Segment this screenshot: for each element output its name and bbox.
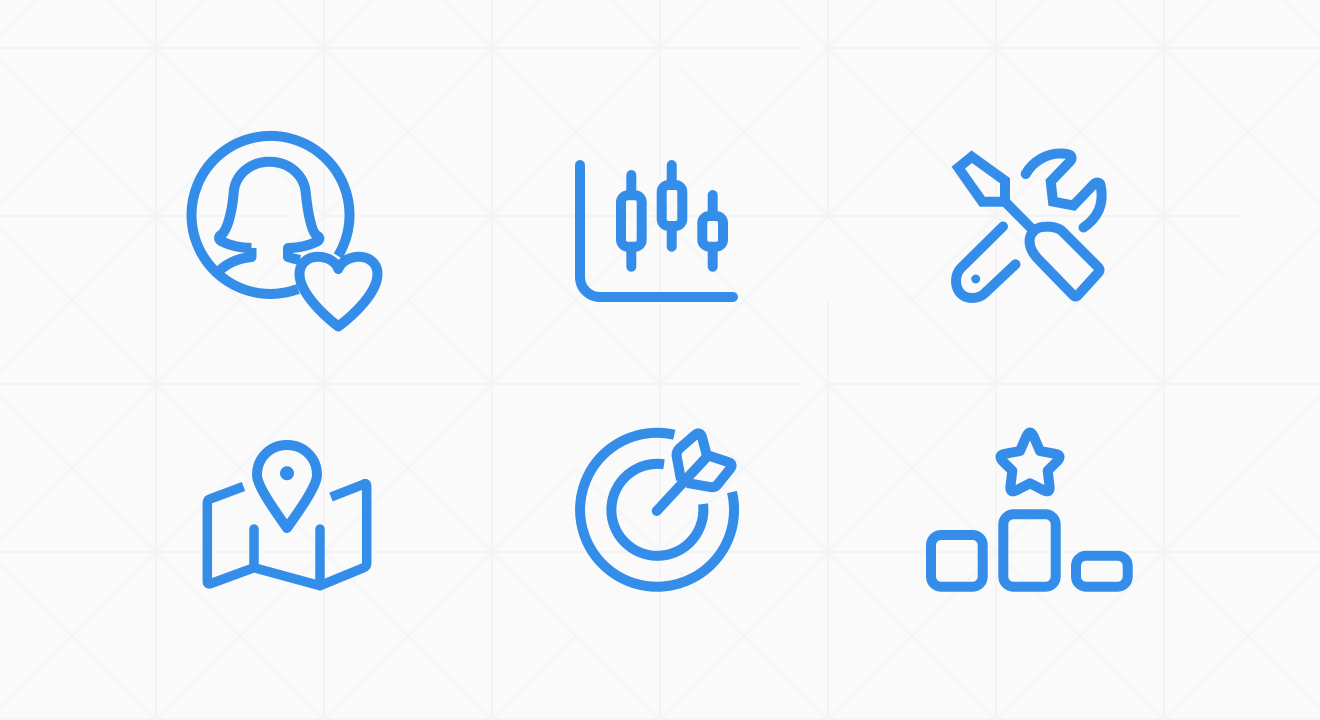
candle 1 <box>621 175 642 267</box>
icon: target with arrow <box>580 433 734 587</box>
map folds <box>254 529 320 586</box>
bar left <box>931 535 983 587</box>
candle 3 <box>702 195 723 267</box>
hair and head <box>218 162 319 272</box>
pin dot <box>280 466 294 480</box>
wrench hole <box>971 274 980 284</box>
star <box>1000 432 1060 491</box>
icon: podium with star <box>931 432 1128 587</box>
wrench handle <box>956 226 1016 298</box>
arrow shaft <box>657 457 707 511</box>
outer ring <box>580 433 734 587</box>
screwdriver head <box>958 157 1033 230</box>
icon: woman profile with heart <box>192 136 378 326</box>
profile circle <box>192 136 350 294</box>
inner ring <box>611 464 703 556</box>
icon: crossed screwdriver and wrench <box>956 154 1102 298</box>
bar middle <box>1003 514 1056 587</box>
candle 2 <box>662 165 682 247</box>
icon: candlestick chart <box>580 165 733 297</box>
icon: folded map with pin <box>207 445 367 586</box>
wrench head <box>1026 154 1102 228</box>
bar right <box>1076 556 1128 587</box>
screwdriver handle <box>1030 227 1100 296</box>
chart axes <box>580 165 733 297</box>
heart <box>300 257 378 326</box>
map sheet <box>207 484 367 586</box>
arrow fletching <box>677 433 732 487</box>
location pin <box>257 445 317 528</box>
